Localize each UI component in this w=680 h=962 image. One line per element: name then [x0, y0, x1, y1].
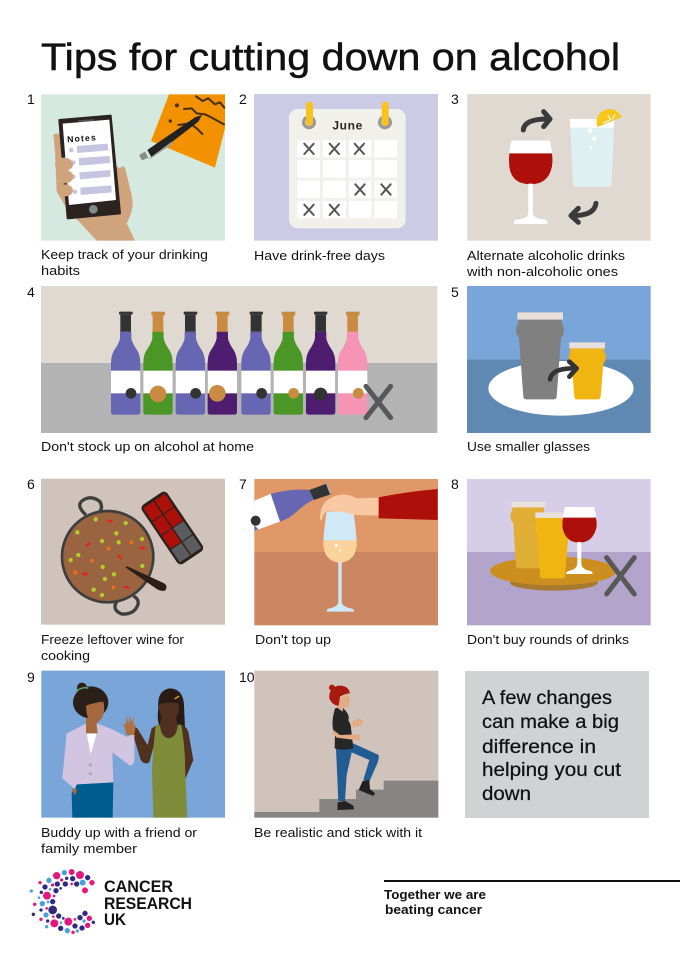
illustration: pan and ice tray	[41, 479, 225, 625]
caption 4: Don't stock up on alcohol at home	[41, 439, 254, 454]
illustration: tray of drinks	[467, 479, 651, 625]
panel 10: be realistic	[239, 669, 438, 840]
caption 5: Use smaller glasses	[467, 439, 591, 454]
panel 9: buddy up: family member	[41, 841, 138, 856]
caption 2: Have drink-free days	[254, 248, 386, 263]
panel 10: be realistic: 10	[239, 669, 255, 685]
title: Tips for cutting down on alcohol	[41, 37, 620, 79]
panel 9: buddy up: 9	[27, 669, 35, 685]
panel 5: smaller glasses: 5	[451, 284, 459, 300]
panel 2: drink-free days	[239, 91, 438, 263]
callout: a few changes	[465, 671, 649, 818]
panel 1: keep track: 1	[27, 91, 35, 107]
illustration: phone with notes and pen: Notes	[67, 132, 96, 144]
illustration: two friends high-fiving	[41, 671, 225, 818]
illustration: calendar	[254, 94, 438, 241]
panel 8: don't buy rounds	[451, 476, 651, 647]
panel 9: buddy up	[27, 669, 225, 856]
illustration: phone with notes and pen	[41, 94, 225, 241]
panel 6: freeze leftover wine	[27, 476, 225, 663]
illustration: row of bottles	[41, 286, 437, 433]
panel 1: keep track	[27, 91, 225, 278]
panel 3: alternate drinks	[451, 91, 651, 279]
caption 6: Freeze leftover wine for	[41, 632, 185, 647]
caption 10: Be realistic and stick with it	[254, 825, 422, 840]
icon: dotted C	[30, 869, 95, 934]
person: woman in lilac cardigan	[62, 683, 136, 818]
panel 5: smaller glasses	[451, 284, 651, 454]
caption 8: Don't buy rounds of drinks	[467, 632, 630, 647]
panel 4: don't stock up	[27, 284, 437, 454]
logo wordmark: RESEARCH	[104, 894, 192, 913]
logo wordmark: UK	[104, 910, 127, 929]
logo: Cancer Research UK	[30, 869, 192, 934]
tagline: beating cancer	[385, 903, 482, 917]
tagline	[384, 880, 680, 917]
callout: a few changes: can make a big	[482, 712, 619, 733]
panel 3: alternate drinks: with non-alcoholic ones	[466, 264, 619, 279]
illustration: calendar: June	[332, 119, 363, 133]
person: friend in green dress	[133, 688, 193, 818]
logo wordmark: CANCER	[104, 877, 173, 896]
panel 3: alternate drinks: 3	[451, 91, 459, 107]
panel 8: don't buy rounds: 8	[451, 476, 459, 492]
tagline: Together we are	[384, 888, 486, 902]
panel 2: drink-free days: 2	[239, 91, 247, 107]
caption 3: Alternate alcoholic drinks	[467, 248, 626, 263]
caption 1: Keep track of your drinking	[41, 247, 208, 262]
callout: a few changes: helping you cut	[482, 760, 622, 781]
panel 1: keep track: habits	[41, 263, 81, 278]
callout: a few changes: A few changes	[482, 688, 612, 709]
panel 4: don't stock up: 4	[27, 284, 35, 300]
callout: a few changes: difference in	[482, 737, 596, 758]
illustration: person climbing stairs	[254, 671, 438, 818]
caption 7: Don't top up	[255, 632, 331, 647]
logo wordmark	[104, 877, 192, 929]
panel 7: don't top up	[239, 476, 438, 647]
callout: a few changes: down	[482, 784, 531, 805]
panel 6: freeze leftover wine: cooking	[41, 648, 90, 663]
caption 9: Buddy up with a friend or	[41, 825, 198, 840]
illustration: hand covering glass	[251, 479, 438, 625]
illustration: wine and water with arrows	[467, 94, 651, 241]
illustration: pint and half pint	[467, 286, 651, 433]
panel 7: don't top up: 7	[239, 476, 247, 492]
panel 6: freeze leftover wine: 6	[27, 476, 35, 492]
